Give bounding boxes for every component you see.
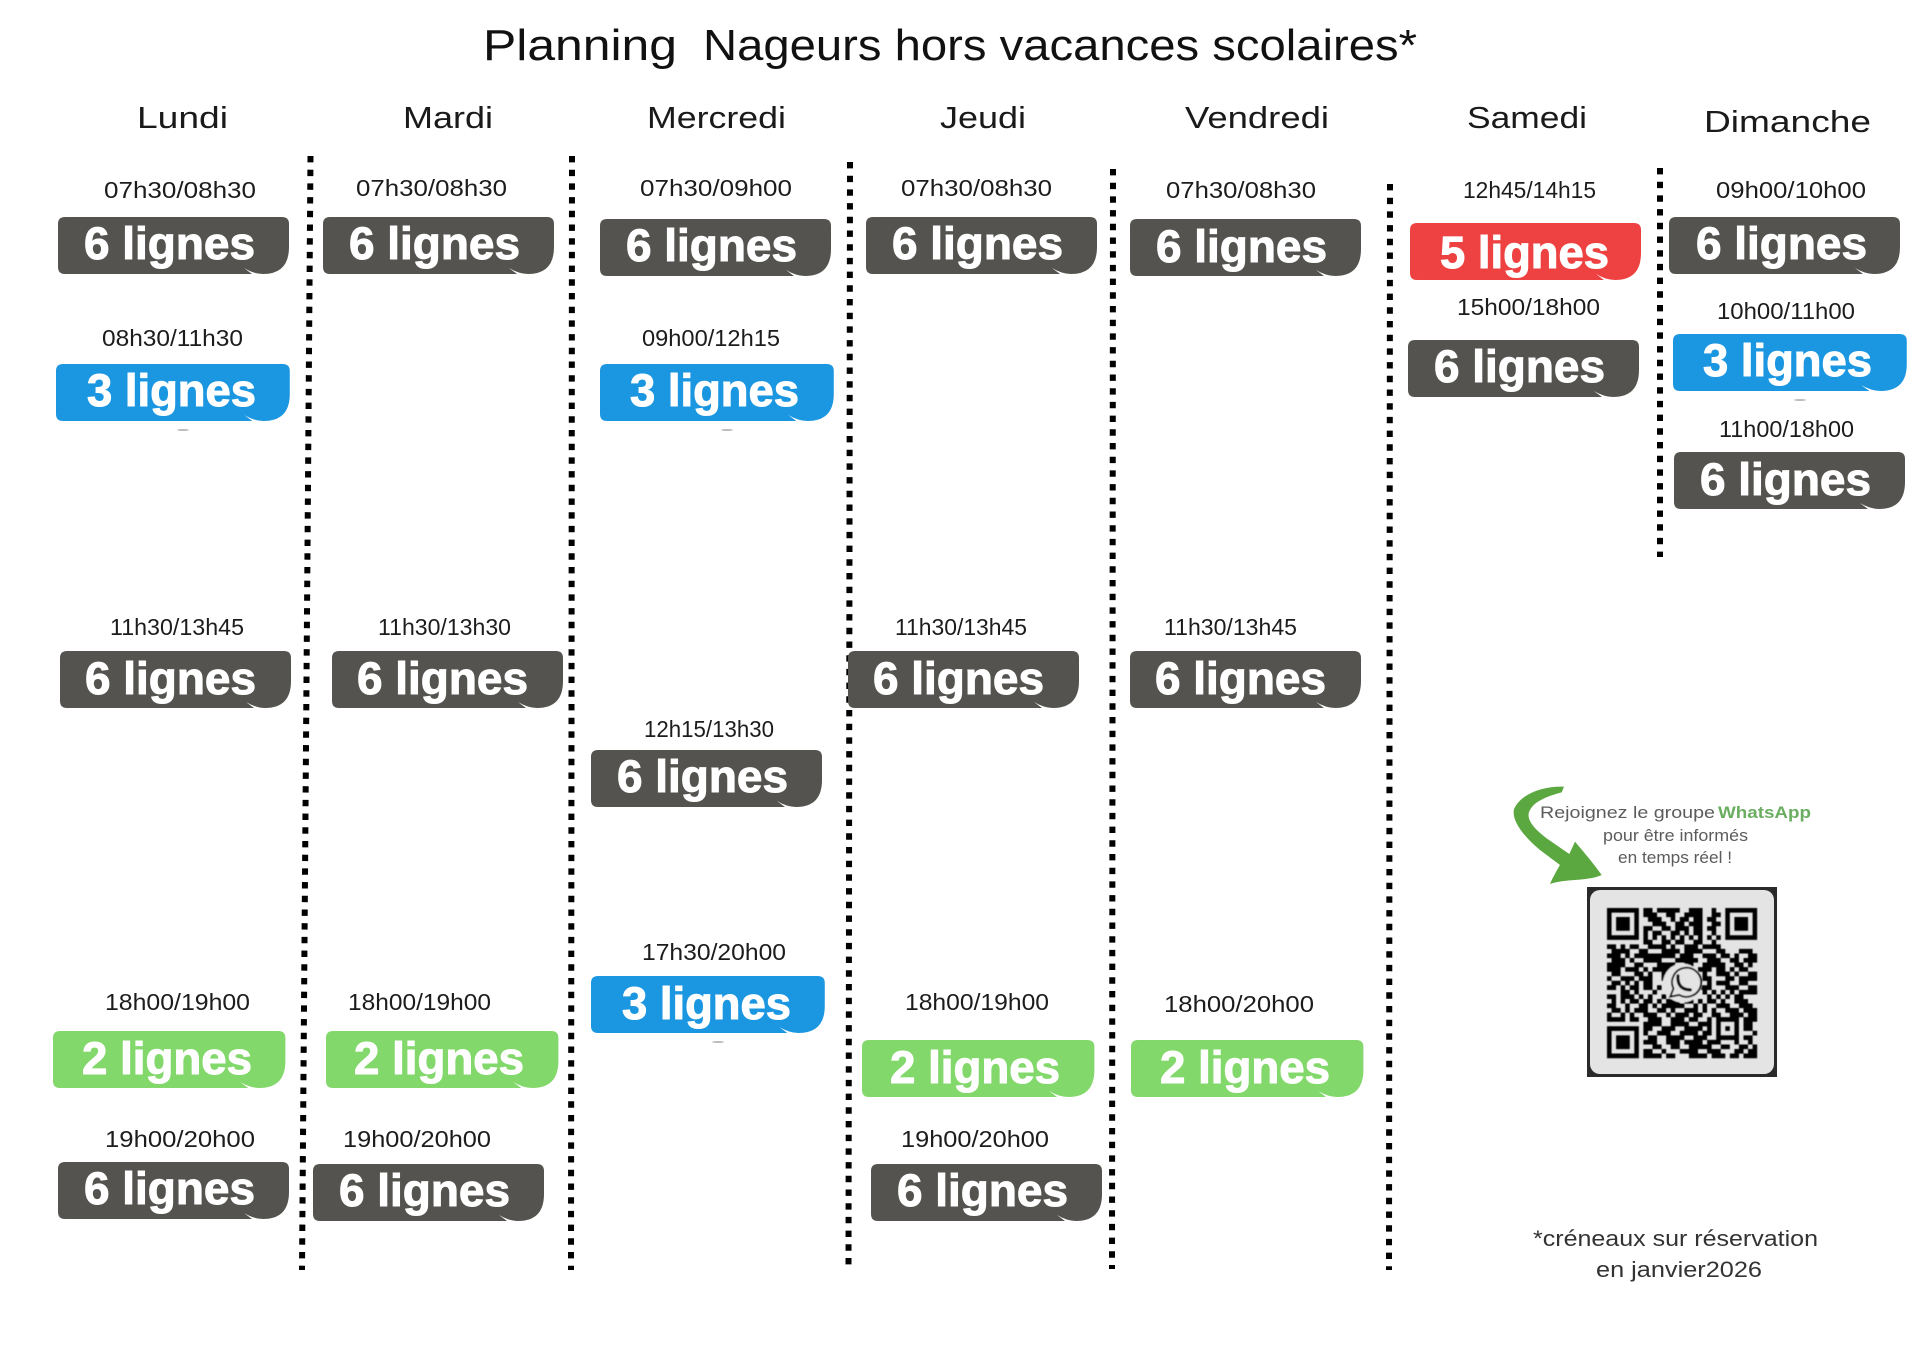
slot: 3 lignes (600, 364, 834, 431)
slot: 2 lignes (53, 1031, 285, 1088)
slot: 6 lignes (313, 1164, 544, 1221)
slot: 2 lignes: 2 lignes (1160, 1042, 1330, 1093)
footnote: en janvier2026 (1596, 1257, 1762, 1282)
slot: 6 lignes (1674, 452, 1905, 509)
time label: 09h00/12h15 (642, 325, 780, 351)
slot: 3 lignes (591, 976, 825, 1043)
slot: 3 lignes (56, 364, 290, 431)
time label: 15h00/18h00 (1457, 294, 1600, 320)
time label: 18h00/20h00 (1164, 991, 1314, 1017)
slot: 6 lignes (1130, 651, 1361, 708)
time label: 07h30/08h30 (356, 175, 507, 201)
heading: Mardi: Mardi (403, 100, 493, 135)
time label: 07h30/08h30 (1166, 177, 1316, 203)
time label: 19h00/20h00 (343, 1126, 491, 1152)
heading: Samedi: Samedi (1467, 100, 1587, 135)
time label: 19h00/20h00 (901, 1126, 1049, 1152)
slot: 6 lignes (323, 217, 554, 274)
slot: 6 lignes: 6 lignes (1156, 221, 1327, 272)
slot: 6 lignes (591, 750, 822, 807)
column: Jeudi (848, 100, 1102, 1221)
slot: 6 lignes (600, 219, 831, 276)
time label: 08h30/11h30 (102, 325, 243, 351)
slot: 6 lignes (58, 1162, 289, 1219)
time label: 11h30/13h45 (895, 614, 1027, 640)
time label: 11h30/13h45 (1164, 614, 1297, 640)
slot: 6 lignes: 6 lignes (617, 751, 788, 802)
slot: 2 lignes (326, 1031, 558, 1088)
heading: Mercredi: Mercredi (647, 100, 786, 135)
title: Planning (483, 21, 677, 70)
time label: 07h30/08h30 (901, 175, 1052, 201)
WhatsApp callout (1514, 787, 1811, 1077)
slot: 3 lignes: 3 lignes (622, 978, 791, 1029)
slot: 6 lignes: 6 lignes (349, 218, 520, 269)
callout text: WhatsApp (1718, 803, 1811, 822)
time label: 07h30/09h00 (640, 175, 792, 201)
QR code (1587, 887, 1777, 1077)
callout text: Rejoignez le groupe (1540, 803, 1715, 822)
slot: 6 lignes (1408, 340, 1639, 397)
slot: 5 lignes: 5 lignes (1440, 227, 1609, 278)
slot: 2 lignes (1131, 1040, 1363, 1097)
time label: 11h30/13h30 (378, 614, 511, 640)
slot: 6 lignes: 6 lignes (626, 220, 797, 271)
slot: 6 lignes: 6 lignes (1155, 653, 1326, 704)
time label: 18h00/19h00 (105, 989, 250, 1015)
slot: 6 lignes (1130, 219, 1361, 276)
time label: 19h00/20h00 (105, 1126, 255, 1152)
slot: 6 lignes (58, 217, 289, 274)
slot: 6 lignes (332, 651, 563, 708)
heading: Vendredi: Vendredi (1185, 100, 1329, 135)
slot: 6 lignes: 6 lignes (892, 218, 1063, 269)
time label: 09h00/10h00 (1716, 177, 1866, 203)
callout text: en temps réel ! (1618, 848, 1732, 867)
slot: 6 lignes: 6 lignes (339, 1165, 510, 1216)
time label: 11h30/13h45 (110, 614, 244, 640)
slot: 6 lignes (871, 1164, 1102, 1221)
icon: WhatsApp logo (1663, 964, 1702, 1003)
time label: 17h30/20h00 (642, 939, 786, 965)
callout text (1540, 803, 1811, 867)
time label: 07h30/08h30 (104, 177, 256, 203)
time label: 12h15/13h30 (644, 716, 774, 742)
slot: 6 lignes: 6 lignes (1696, 218, 1867, 269)
slot: 6 lignes: 6 lignes (873, 653, 1044, 704)
slot: 3 lignes (1673, 334, 1907, 401)
slot: 6 lignes: 6 lignes (357, 653, 528, 704)
icon: green curved arrow (1514, 787, 1602, 884)
column: Samedi (1408, 100, 1641, 397)
footnote (1533, 1226, 1818, 1282)
footnote: *créneaux sur réservation (1533, 1226, 1818, 1251)
heading: Lundi: Lundi (137, 100, 228, 135)
heading: Jeudi: Jeudi (940, 100, 1026, 135)
time label: 11h00/18h00 (1719, 416, 1854, 442)
time label: 18h00/19h00 (348, 989, 491, 1015)
slot: 6 lignes (60, 651, 291, 708)
slot: 2 lignes: 2 lignes (82, 1033, 252, 1084)
column: Vendredi (1130, 100, 1363, 1097)
callout text: pour être informés (1603, 826, 1748, 845)
slot: 6 lignes (848, 651, 1079, 708)
column: Mercredi (591, 100, 834, 1043)
slot: 6 lignes: 6 lignes (85, 653, 256, 704)
title: Nageurs hors vacances scolaires* (703, 21, 1417, 70)
slot: 6 lignes: 6 lignes (897, 1165, 1068, 1216)
column: Lundi (53, 100, 291, 1219)
slot: 6 lignes: 6 lignes (1700, 454, 1871, 505)
column: Mardi (313, 100, 563, 1221)
slot: 3 lignes: 3 lignes (87, 365, 256, 416)
slot: 2 lignes (862, 1040, 1094, 1097)
slot: 2 lignes: 2 lignes (890, 1042, 1060, 1093)
slot: 3 lignes: 3 lignes (1703, 335, 1872, 386)
slot: 6 lignes (1669, 217, 1900, 274)
slot: 6 lignes: 6 lignes (84, 218, 255, 269)
slot: 3 lignes: 3 lignes (630, 365, 799, 416)
time label: 10h00/11h00 (1717, 298, 1855, 324)
time label: 18h00/19h00 (905, 989, 1049, 1015)
column: Dimanche (1669, 104, 1907, 509)
slot: 6 lignes (866, 217, 1097, 274)
slot: 6 lignes: 6 lignes (84, 1163, 255, 1214)
slot: 5 lignes (1410, 223, 1641, 280)
heading: Dimanche: Dimanche (1704, 104, 1871, 139)
slot: 2 lignes: 2 lignes (354, 1033, 524, 1084)
slot: 6 lignes: 6 lignes (1434, 341, 1605, 392)
time label: 12h45/14h15 (1463, 177, 1596, 203)
